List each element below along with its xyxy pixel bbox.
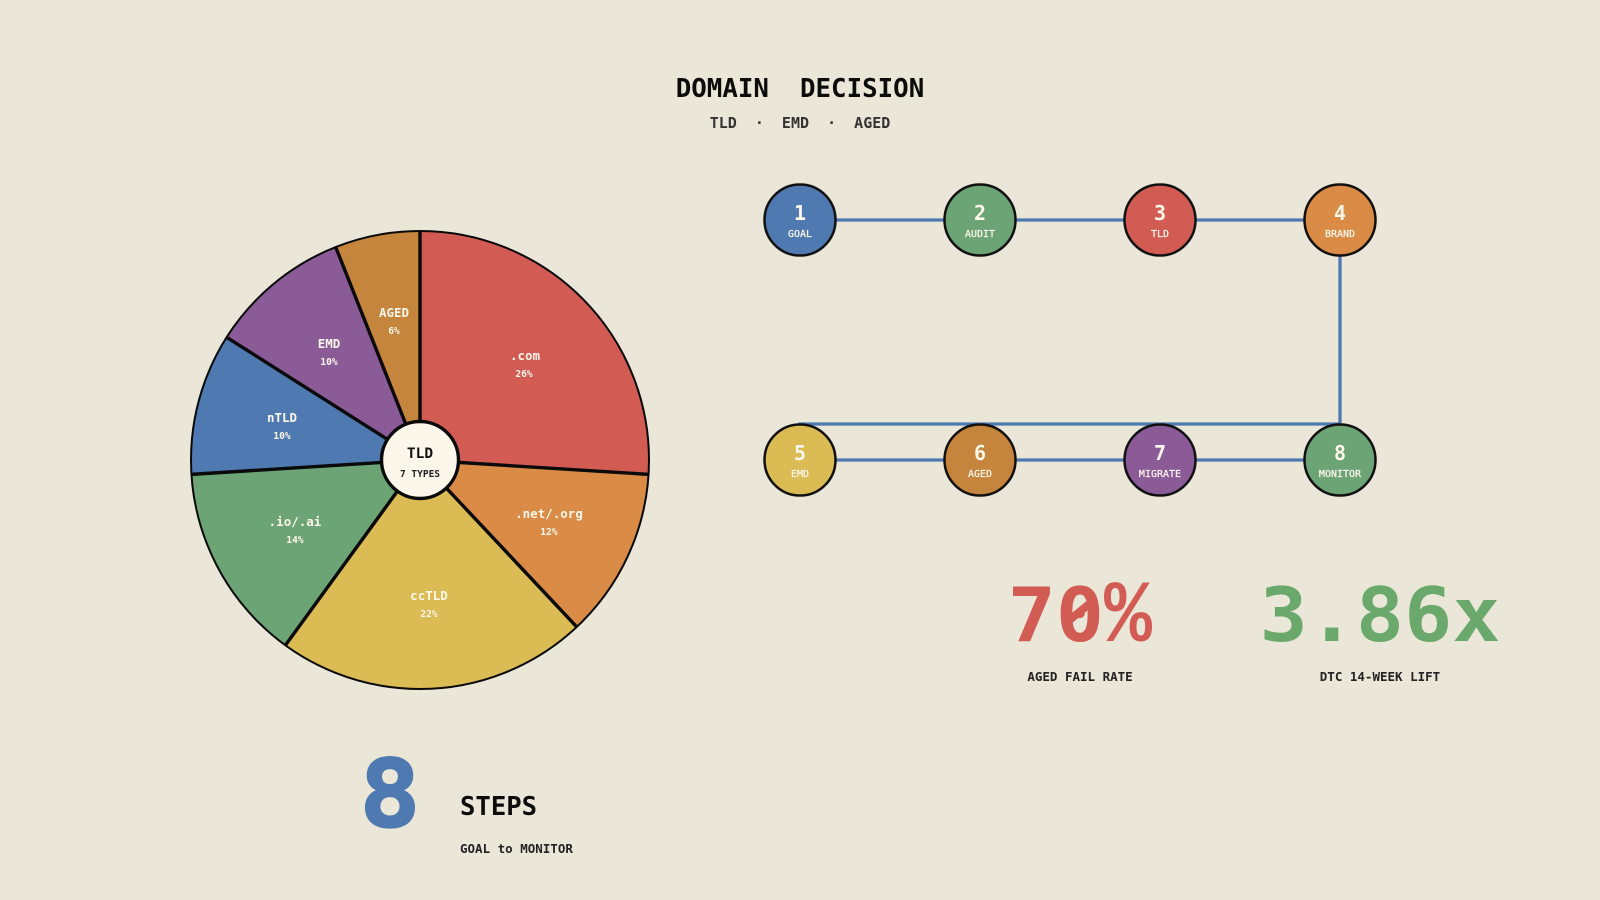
pie centre hub: 7 TYPES [400, 469, 440, 480]
stat: DTC lift: 3.86x [1260, 572, 1500, 659]
slice: nTLD 10% [191, 337, 420, 474]
flow connector [800, 220, 1340, 460]
pie centre hub: TLD [407, 446, 433, 462]
step 5: 5 [794, 441, 806, 465]
slice: AGED 6%: AGED [379, 305, 409, 320]
slice: .net/.org 12%: 12% [540, 527, 558, 538]
subtitle: TLD · EMD · AGED [710, 114, 890, 132]
pie chart: TLD types [191, 231, 649, 689]
slice: EMD 10%: EMD [318, 336, 340, 351]
slice: EMD 10% [227, 247, 420, 460]
step 7 [1124, 424, 1196, 496]
slice: .net/.org 12%: .net/.org [515, 506, 583, 521]
step 8: MONITOR [1319, 469, 1362, 480]
slice: .com 26%: 26% [515, 369, 533, 380]
step 1: 1 [794, 201, 806, 225]
slice: AGED 6% [336, 231, 420, 460]
step 2: AUDIT [965, 229, 995, 240]
step 6: 6 [974, 441, 986, 465]
title: DOMAIN DECISION [676, 74, 924, 104]
step 7: 7 [1154, 441, 1166, 465]
step 8: 8 [1334, 441, 1346, 465]
stat: 8 steps: 8 [360, 739, 420, 848]
slice: AGED 6%: 6% [388, 326, 400, 337]
step 2 [944, 184, 1016, 256]
stat: 8 steps [360, 739, 573, 856]
step 3 [1124, 184, 1196, 256]
slice: .io/.ai 14% [191, 460, 420, 645]
pie centre hub [382, 422, 458, 498]
slice: ccTLD 22%: ccTLD [410, 588, 448, 603]
step 6: AGED [968, 469, 992, 480]
step 4: BRAND [1325, 229, 1355, 240]
step 3: 3 [1154, 201, 1166, 225]
slice: .io/.ai 14%: 14% [286, 535, 304, 546]
slice: .com 26% [420, 231, 649, 474]
step 1 [764, 184, 836, 256]
slice: .net/.org 12% [420, 460, 649, 627]
stat: aged fail rate [1008, 569, 1153, 684]
slice: ccTLD 22%: 22% [420, 609, 438, 620]
slice: EMD 10%: 10% [320, 357, 338, 368]
slice: nTLD 10%: 10% [273, 431, 291, 442]
stat: aged fail rate: AGED FAIL RATE [1027, 669, 1133, 684]
step 4: 4 [1334, 201, 1346, 225]
stat: 8 steps: GOAL to MONITOR [460, 841, 573, 856]
slice: ccTLD 22% [285, 460, 577, 689]
stat: aged fail rate: % [1104, 569, 1153, 668]
stat: DTC lift: DTC 14-WEEK LIFT [1320, 669, 1440, 684]
slice: .com 26%: .com [510, 348, 541, 363]
step 4 [1304, 184, 1376, 256]
step 6 [944, 424, 1016, 496]
step 1: GOAL [788, 229, 812, 240]
step 7: MIGRATE [1139, 469, 1181, 480]
step 5: EMD [791, 469, 809, 480]
step 8 [1304, 424, 1376, 496]
step 3: TLD [1151, 229, 1169, 240]
slice: nTLD 10%: nTLD [267, 410, 297, 425]
step 2: 2 [974, 201, 986, 225]
slice: .io/.ai 14%: .io/.ai [269, 514, 322, 529]
stat: 8 steps: STEPS [460, 792, 537, 822]
process flow: 8 steps [764, 184, 1376, 496]
stat: aged fail rate: 70 [1008, 572, 1104, 659]
step 5 [764, 424, 836, 496]
